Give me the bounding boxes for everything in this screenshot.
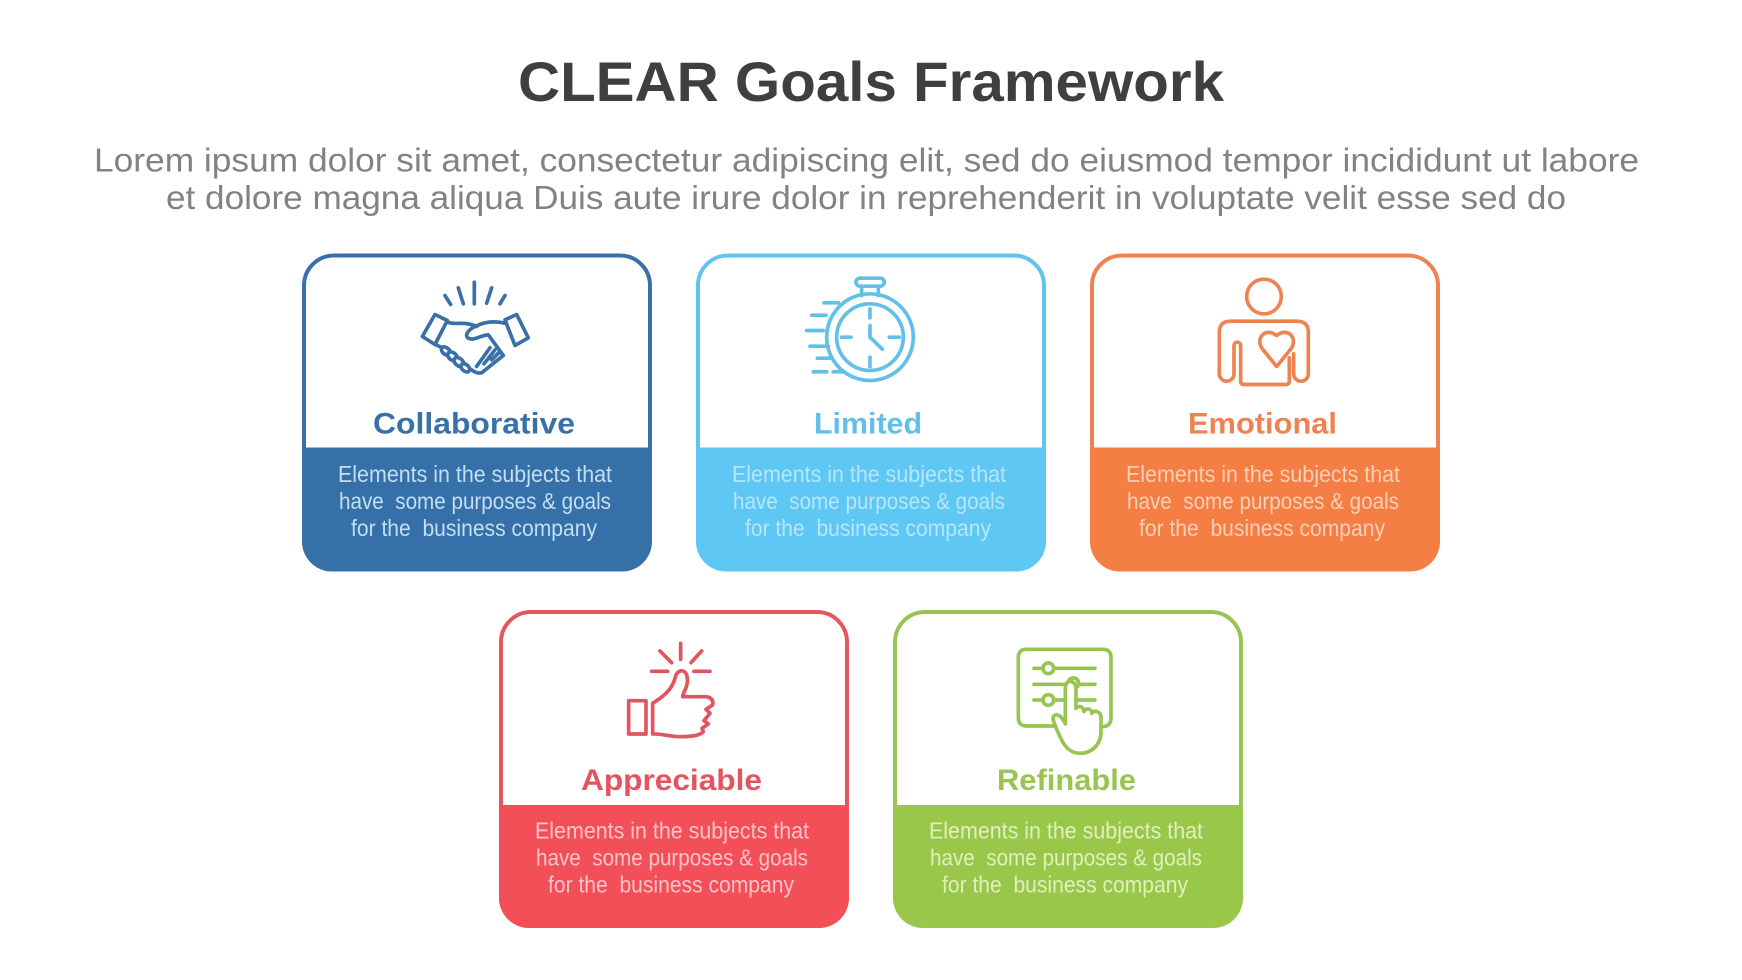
- description: Elements in the subjects that: [338, 461, 613, 487]
- description: have some purposes & goals: [930, 844, 1202, 870]
- description: [535, 818, 810, 898]
- label: Limited: [814, 408, 922, 440]
- description: have some purposes & goals: [733, 488, 1005, 514]
- description: for the business company: [1139, 515, 1385, 541]
- description: [1126, 461, 1401, 541]
- description: [732, 461, 1007, 541]
- panel: Collaborative: [302, 256, 652, 572]
- icon: handshake: [422, 282, 528, 374]
- panel: Limited: [696, 256, 1046, 572]
- panel: Appreciable: [499, 612, 849, 928]
- subtitle text block: [94, 142, 1639, 216]
- icon: touch sliders: [1018, 649, 1111, 753]
- description: have some purposes & goals: [1127, 488, 1399, 514]
- description: for the business company: [548, 872, 794, 898]
- title: CLEAR Goals Framework: [518, 50, 1225, 113]
- description: Elements in the subjects that: [732, 461, 1007, 487]
- label: Refinable: [997, 764, 1136, 797]
- panel: Refinable: [893, 612, 1243, 928]
- icon: stopwatch: [807, 278, 913, 380]
- description: Elements in the subjects that: [1126, 461, 1401, 487]
- description: Elements in the subjects that: [929, 818, 1204, 844]
- description: have some purposes & goals: [536, 844, 808, 870]
- description: for the business company: [942, 872, 1188, 898]
- panel: Emotional: [1090, 256, 1440, 572]
- label: Appreciable: [581, 764, 762, 797]
- description: [929, 818, 1204, 898]
- description: for the business company: [351, 515, 597, 541]
- subtitle text block: et dolore magna aliqua Duis aute irure dolor in reprehenderit in voluptate velit esse sed do: [166, 179, 1566, 216]
- subtitle text block: Lorem ipsum dolor sit amet, consectetur adipiscing elit, sed do eiusmod tempor incididunt ut labore: [94, 142, 1639, 178]
- description: Elements in the subjects that: [535, 818, 810, 844]
- icon: thumbs up: [629, 643, 713, 737]
- label: Emotional: [1188, 408, 1337, 440]
- description: for the business company: [745, 515, 991, 541]
- description: have some purposes & goals: [339, 488, 611, 514]
- description: [338, 461, 613, 541]
- label: Collaborative: [373, 408, 575, 440]
- icon: person with heart: [1219, 279, 1308, 384]
